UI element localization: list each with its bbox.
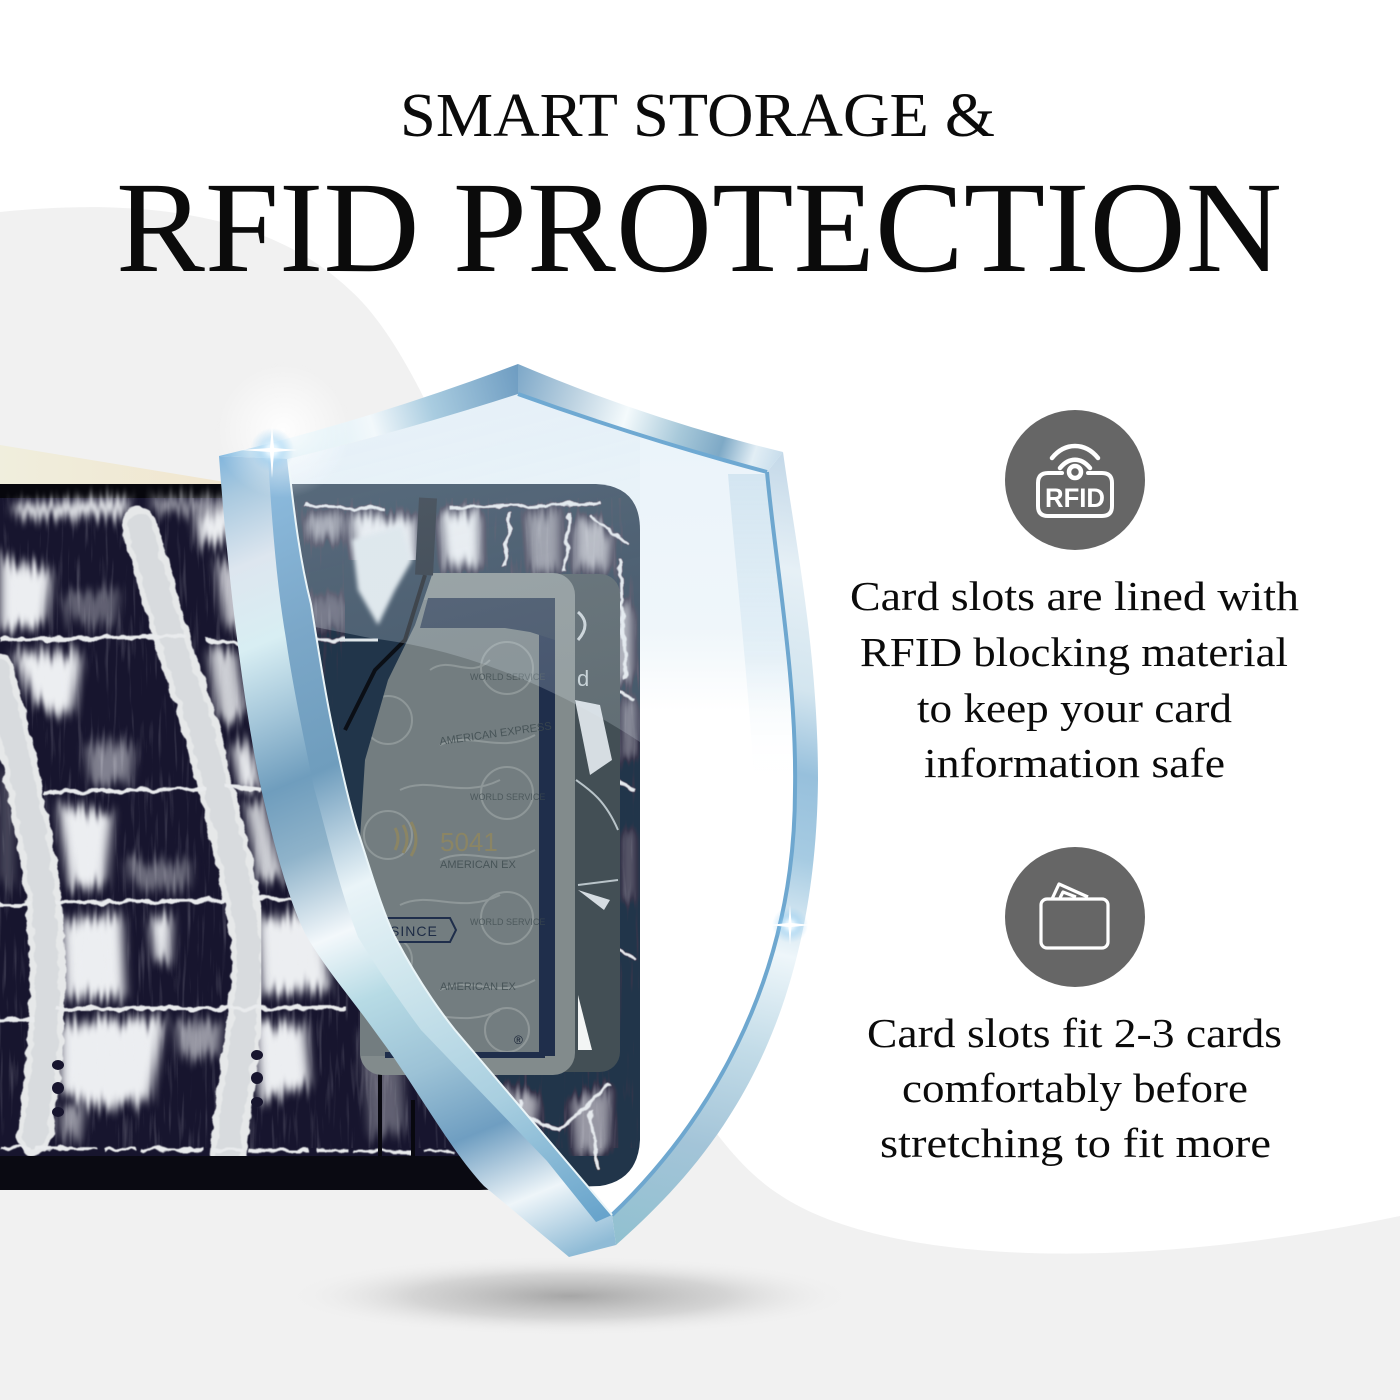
shield: top edges	[219, 364, 518, 459]
back card: d	[577, 666, 589, 691]
floor shadow	[285, 1256, 855, 1336]
front card	[360, 573, 575, 1075]
shield glass backing	[434, 394, 765, 1212]
shield: glass sheen	[292, 474, 790, 742]
sparkle: top left	[215, 362, 351, 498]
text: card capacity: comfortably before	[902, 1065, 1248, 1111]
front card: AMERICAN EX	[440, 981, 516, 993]
text: RFID blocking: information safe	[924, 740, 1225, 786]
text: RFID blocking: RFID blocking material	[860, 629, 1288, 675]
icon: RFID: RFID	[1045, 483, 1105, 513]
shield: inner steel strip	[268, 458, 612, 1222]
text: RFID blocking	[850, 573, 1299, 786]
text: RFID blocking: to keep your card	[917, 685, 1232, 731]
tint of wallet seen through glass	[280, 484, 645, 1194]
back card	[510, 574, 620, 1072]
front card: AMERICAN EXPRESS	[439, 720, 552, 748]
leather white mottling	[0, 498, 636, 1160]
front card: WORLD SERVICE	[470, 917, 545, 927]
front card: ®	[514, 1033, 523, 1047]
texture streaks	[0, 498, 640, 1148]
front card: 5041	[440, 827, 498, 857]
wallet rim	[0, 484, 222, 498]
title: SMART STORAGE &	[400, 82, 995, 150]
text: card capacity: stretching to fit more	[880, 1120, 1271, 1166]
right edge scale seams	[303, 503, 636, 1170]
icon: RFID	[1005, 410, 1145, 550]
title: RFID PROTECTION	[116, 156, 1282, 300]
white scale bands	[0, 525, 249, 1161]
shield: left metallic bevel	[219, 456, 616, 1257]
front card: SINCE	[390, 923, 438, 939]
cream wallet interior edge	[0, 445, 225, 486]
cards inside slot	[340, 498, 620, 1075]
stitches	[378, 1074, 415, 1156]
text: RFID blocking: Card slots are lined with	[850, 573, 1299, 619]
wallet: crocodile leather	[0, 484, 645, 1194]
front card: AMERICAN EX	[440, 859, 516, 871]
front card: WORLD SERVICE	[470, 672, 545, 682]
scale seams	[0, 636, 480, 1152]
shield	[219, 364, 818, 1257]
front card: WORLD SERVICE	[470, 792, 545, 802]
shield: right bevel	[612, 452, 818, 1245]
text: card capacity	[867, 1010, 1282, 1166]
sparkle: right edge	[768, 905, 812, 945]
icon: wallet with cards	[1005, 847, 1145, 987]
text: card capacity: Card slots fit 2-3 cards	[867, 1010, 1282, 1056]
title	[116, 82, 1282, 300]
wallet flap over card	[340, 498, 437, 836]
band nodules	[52, 1050, 263, 1117]
